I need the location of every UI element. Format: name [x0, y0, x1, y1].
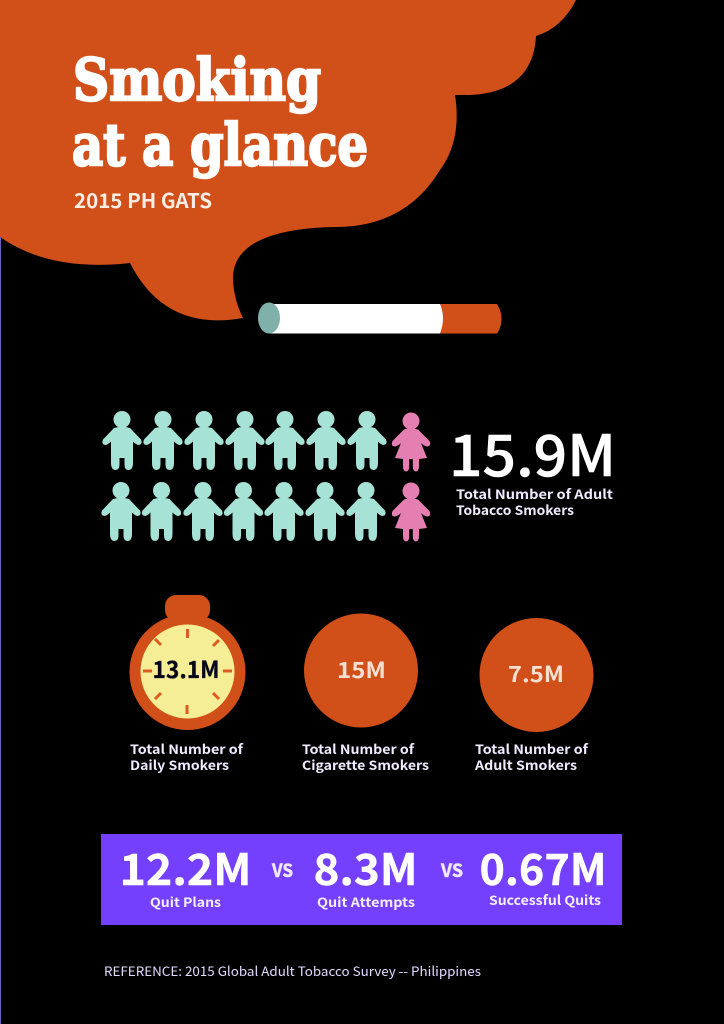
stat: 15.9M: 15.9M — [449, 411, 616, 493]
label: adult smokers: Adult Smokers — [474, 755, 577, 774]
circle: 15M — [304, 614, 418, 728]
label: adult tobacco smokers: Total Number of Adult — [456, 484, 614, 503]
label: daily smokers — [130, 739, 244, 774]
label: adult smokers — [474, 739, 589, 774]
label: daily smokers: Total Number of — [130, 739, 244, 758]
title: at a glance — [72, 111, 368, 179]
vs: VS — [271, 857, 293, 883]
label: cigarette smokers — [302, 739, 429, 774]
title: Smoking — [73, 46, 321, 114]
circle: 7.5M — [480, 618, 594, 732]
reference note: REFERENCE: 2015 Global Adult Tobacco Survey -- Philippines — [104, 961, 481, 980]
subtitle: 2015 PH GATS — [74, 185, 212, 214]
icon: cigarette — [258, 302, 502, 334]
stat: successful quits: 0.67M — [480, 836, 606, 898]
stat: quit plans: Quit Plans — [150, 892, 221, 911]
icon: stopwatch with 13.1M — [130, 595, 246, 730]
label: daily smokers: Daily Smokers — [130, 755, 229, 774]
panel: quit comparison — [101, 834, 622, 925]
row 1 of people — [102, 411, 430, 472]
stat: quit attempts: 8.3M — [314, 836, 418, 898]
vs: VS — [440, 857, 463, 883]
label: adult tobacco smokers: Tobacco Smokers — [456, 500, 574, 519]
left edge line — [0, 237, 1, 1024]
value: 13.1M — [152, 651, 220, 685]
label: adult smokers: Total Number of — [475, 739, 589, 758]
stat: quit attempts: Quit Attempts — [317, 892, 415, 911]
circle: 15M: 15M — [337, 653, 386, 685]
circle: 7.5M: 7.5M — [508, 657, 564, 689]
label: cigarette smokers: Total Number of — [302, 739, 415, 758]
stat: successful quits: Successful Quits — [489, 890, 601, 909]
stat: quit plans: 12.2M — [120, 836, 252, 898]
pictogram: adult tobacco smokers — [101, 411, 430, 542]
title — [72, 46, 368, 179]
label: cigarette smokers: Cigarette Smokers — [302, 755, 429, 774]
row 2 of people — [101, 482, 430, 542]
smoke cloud — [0, 0, 576, 320]
label: adult tobacco smokers — [456, 484, 614, 519]
